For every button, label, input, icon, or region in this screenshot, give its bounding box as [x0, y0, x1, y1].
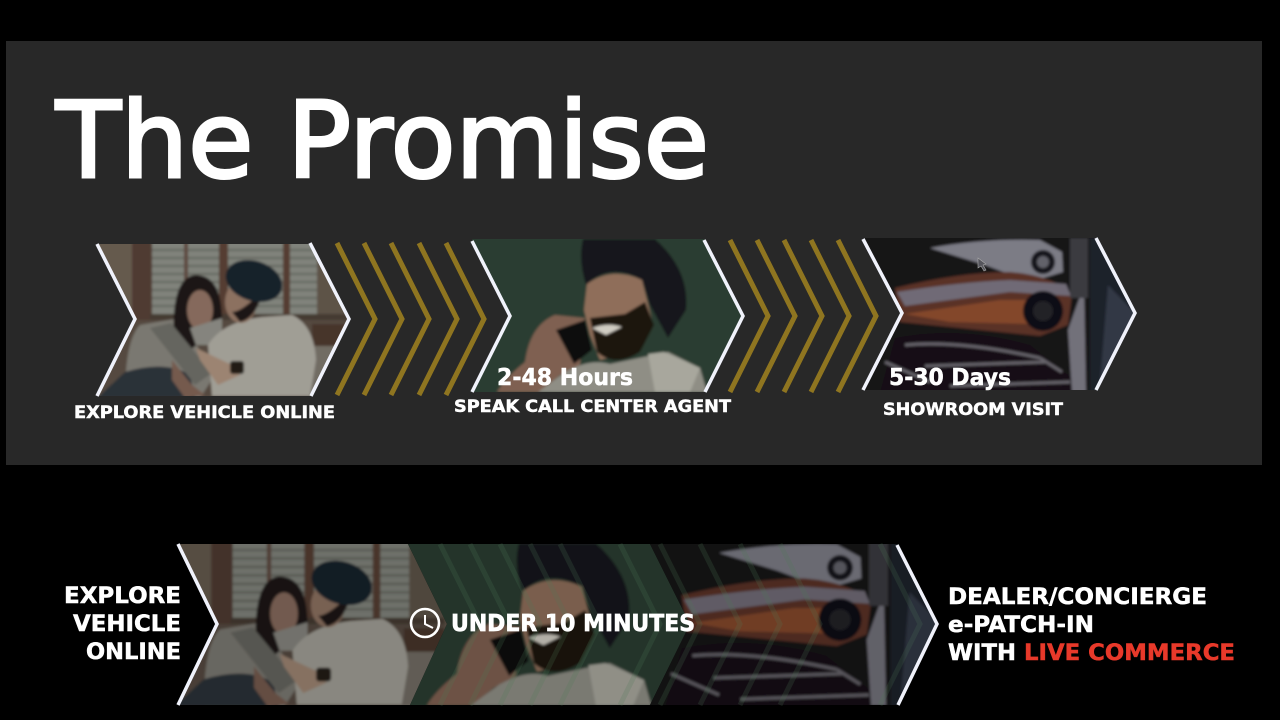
left label: VEHICLE	[73, 612, 181, 637]
icon: cursor	[978, 258, 986, 271]
photo: couple with tablet	[180, 544, 447, 705]
right label: e-PATCH-IN	[948, 613, 1094, 638]
left label: ONLINE	[86, 640, 181, 665]
chevron frame	[863, 238, 1135, 390]
right label: LIVE COMMERCE	[1024, 641, 1235, 666]
right label: DEALER/CONCIERGE	[948, 585, 1207, 610]
time callout: UNDER 10 MINUTES	[451, 611, 695, 637]
left label	[64, 584, 181, 665]
time label: 2-48 Hours	[497, 365, 633, 391]
step 3: showroom visit	[860, 235, 1140, 420]
step label: SPEAK CALL CENTER AGENT	[454, 397, 731, 417]
merged photo strip	[166, 539, 944, 710]
step 1: explore vehicle online	[74, 240, 360, 423]
panel: the promise	[6, 41, 1262, 465]
chevron frame	[97, 243, 349, 396]
step label: SHOWROOM VISIT	[883, 400, 1063, 420]
panel: live commerce journey	[64, 539, 1235, 710]
chevron frame	[178, 544, 937, 705]
step 2: speak call center agent	[454, 235, 750, 417]
icon: clock	[411, 609, 439, 637]
photo: couple with tablet	[99, 244, 347, 396]
photo: sports cars	[860, 235, 1140, 393]
arrows: gold chevrons 1	[337, 243, 484, 395]
title: The Promise	[55, 80, 709, 202]
right label: WITH	[948, 641, 1016, 666]
step label: EXPLORE VEHICLE ONLINE	[74, 403, 335, 423]
photo: sports cars	[644, 539, 944, 707]
chevron frame	[472, 240, 743, 392]
left label: EXPLORE	[64, 584, 181, 609]
photo: man on phone	[408, 544, 689, 705]
photo: man on phone	[465, 235, 750, 395]
right label	[948, 585, 1235, 666]
strip dimming	[178, 544, 937, 705]
green chevron overlay	[440, 544, 920, 705]
arrows: gold chevrons 2	[730, 240, 876, 392]
time label: 5-30 Days	[889, 365, 1011, 391]
